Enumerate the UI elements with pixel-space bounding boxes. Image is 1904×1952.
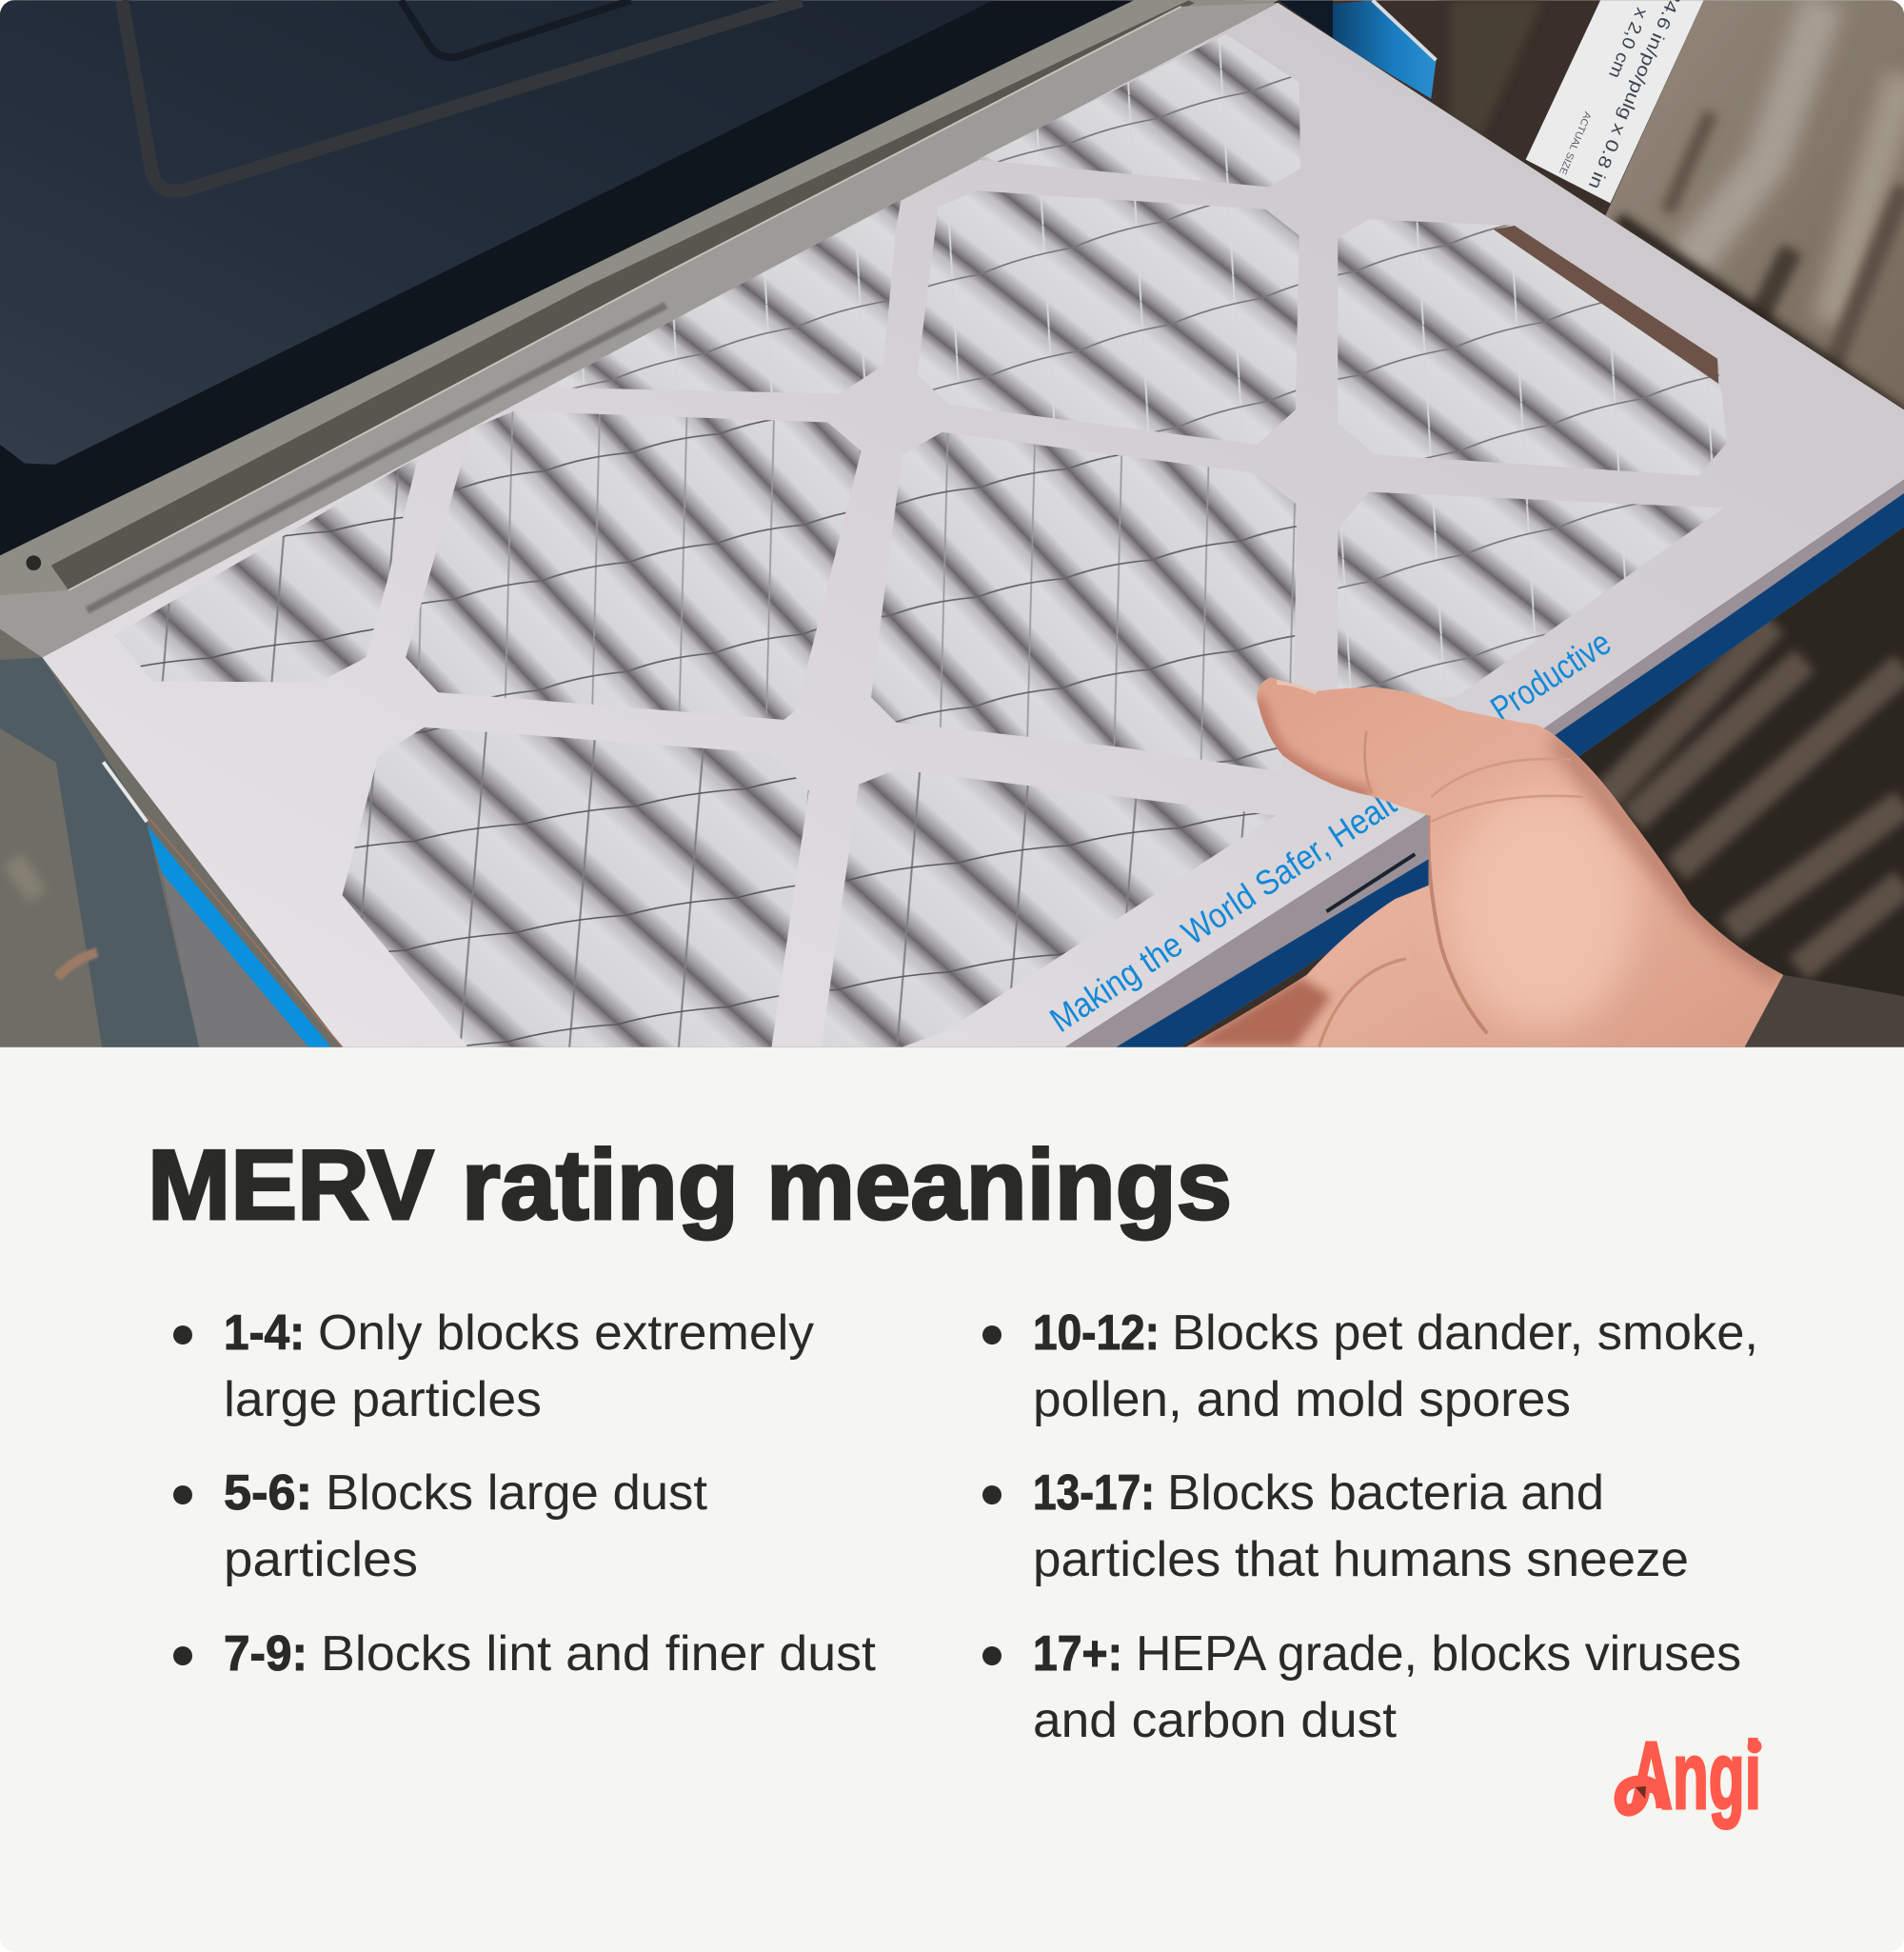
dark post and blue tag, top [1278,0,1611,212]
ribbed lining, lower right [1578,528,1904,996]
item: MERV 1-4: Only blocks extremely [318,1305,814,1361]
blue filter edge bands [147,480,1904,1047]
filter pleats: opening panels [114,34,1727,1047]
filter edge text: Making the World Safer, Healthy: Making the World Safer, Healt [1043,784,1402,1040]
title: MERV rating meanings [148,1130,1232,1241]
item: MERV 17+: 17+: [1033,1626,1122,1682]
item: MERV 1-4: 1-4: [224,1305,305,1361]
furnace metal, lower left [0,623,348,1047]
Angi logo: Angi [1630,1723,1761,1829]
white product label [1526,0,1704,203]
item: MERV 10-12: Blocks pet dander, smoke, [1172,1305,1758,1361]
white product label: x 2,0 cm [1605,5,1653,82]
sleeve [1745,975,1904,1047]
Angi logo [1620,1723,1761,1829]
item: MERV 10-12: pollen, and mold spores [1033,1372,1571,1427]
item: MERV 5-6: 5-6: [224,1465,312,1521]
item: MERV 10-12: 10-12: [1033,1305,1160,1361]
item: MERV 17+: and carbon dust [1033,1693,1398,1748]
item: MERV 7-9: Blocks lint and finer dust [321,1626,877,1682]
item: MERV 13-17: particles that humans sneeze [1033,1532,1689,1587]
item: MERV 5-6: Blocks large dust [326,1465,708,1521]
left list column [173,1305,877,1682]
item: MERV 7-9: 7-9: [224,1626,307,1682]
item: MERV 13-17 [982,1465,1689,1587]
fabric duct lining, upper right [1593,0,1904,424]
filter edge text: Productive: Productive [1483,623,1617,728]
metal frame strip [0,0,1278,658]
filter cardboard frame [42,3,1904,1047]
dark blue furnace door [0,0,1244,586]
white product label: ACTUAL SIZE [1557,110,1593,176]
right list column [982,1305,1758,1748]
item: MERV 5-6: particles [224,1532,418,1587]
item: MERV 5-6 [173,1465,708,1587]
item: MERV 17+ [982,1626,1741,1748]
item: MERV 17+: HEPA grade, blocks viruses [1136,1626,1741,1682]
item: MERV 1-4 [173,1305,814,1427]
item: MERV 1-4: large particles [224,1372,542,1427]
item: MERV 10-12 [982,1305,1758,1427]
photo: hand sliding an air filter into a furnace [0,0,1904,1047]
item: MERV 13-17: Blocks bacteria and [1167,1465,1604,1521]
hand gripping the filter [1182,672,1792,1052]
item: MERV 13-17: 13-17: [1033,1465,1155,1521]
